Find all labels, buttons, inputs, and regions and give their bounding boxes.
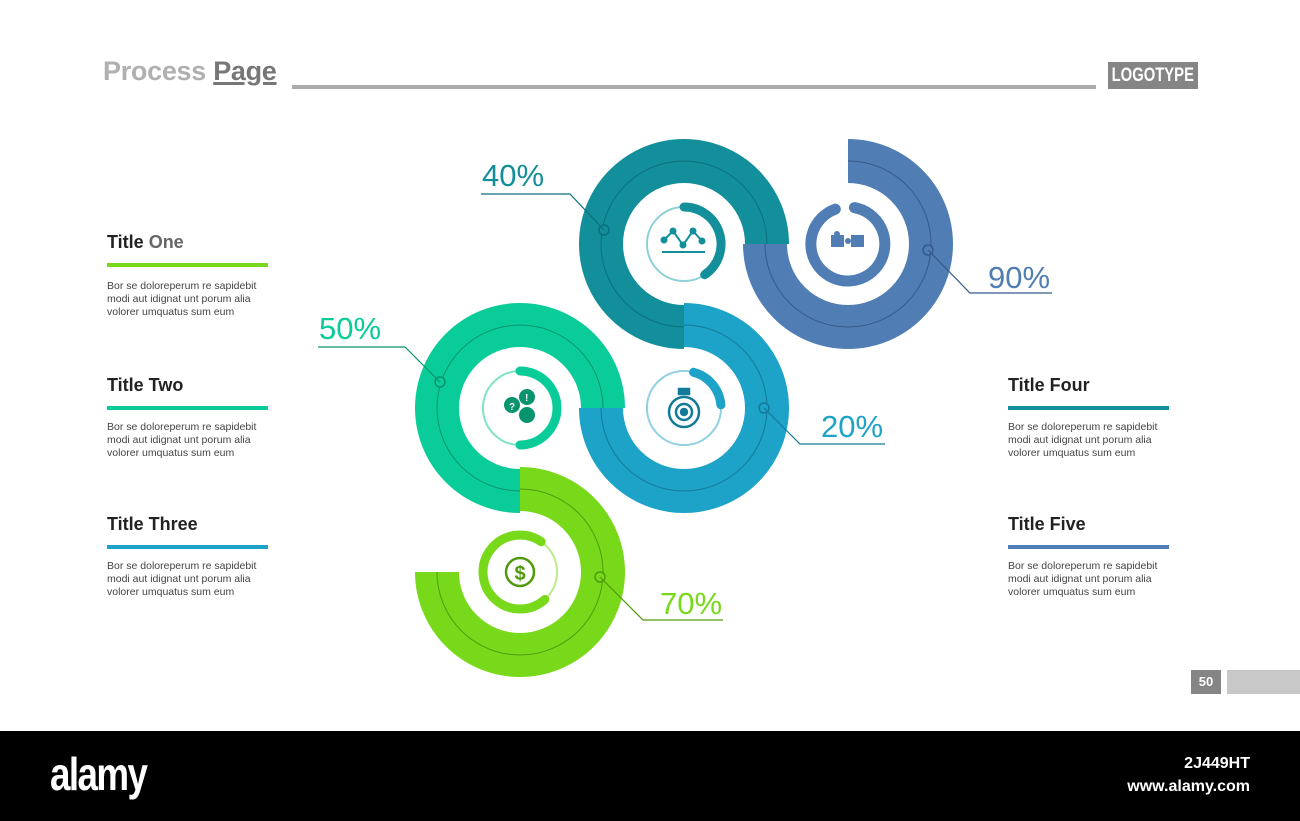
footer url: www.alamy.com xyxy=(1127,778,1250,795)
icon: dollar cycle xyxy=(506,558,534,586)
logotype: LOGOTYPE xyxy=(1112,65,1194,86)
text block: Title Three: modi aut idignat unt porum alia xyxy=(107,573,251,585)
footer band xyxy=(0,731,1300,821)
text block: Title Two: Bor se doloreperum re sapidebit xyxy=(107,421,256,433)
text block: Title Three xyxy=(107,514,268,598)
text block: Title Five: modi aut idignat unt porum alia xyxy=(1008,573,1152,585)
callout: 50% xyxy=(318,311,440,382)
header line xyxy=(292,85,1096,89)
text block: Title Two: modi aut idignat unt porum alia xyxy=(107,434,251,446)
icon: chat bubbles: ? xyxy=(509,402,515,413)
ring: 40% xyxy=(599,161,767,327)
text block: Title Four: volorer umquatus sum eum xyxy=(1008,447,1135,459)
ring: 90% xyxy=(765,161,933,327)
text block: Title Four: modi aut idignat unt porum alia xyxy=(1008,434,1152,446)
text block: Title One: modi aut idignat unt porum alia xyxy=(107,293,251,305)
text block: Title One xyxy=(107,232,268,318)
footer id: 2J449HT xyxy=(1184,755,1250,772)
text block: Title Five: volorer umquatus sum eum xyxy=(1008,586,1135,598)
text block: Title Five: Bor se doloreperum re sapidebit xyxy=(1008,560,1157,572)
text block: Title Four: Title Four xyxy=(1008,375,1090,395)
title: Process Page xyxy=(103,56,277,86)
icon: stopwatch gear xyxy=(669,389,699,427)
callout: 70%: 70% xyxy=(660,586,722,621)
text block: Title Three: volorer umquatus sum eum xyxy=(107,586,234,598)
footer logo: alamy xyxy=(50,748,146,800)
text block: Title Two: Title Two xyxy=(107,375,183,395)
text block: Title Two xyxy=(107,375,268,459)
text block: Title Two: volorer umquatus sum eum xyxy=(107,447,234,459)
ring: 70% xyxy=(437,489,605,655)
text block: Title Four xyxy=(1008,375,1169,459)
page bar xyxy=(1227,670,1300,694)
icon: line chart xyxy=(662,228,705,252)
page number: 50 xyxy=(1199,674,1213,689)
icon: chat bubbles xyxy=(504,389,535,423)
callout: 70% xyxy=(600,577,723,621)
text block: Title Three: Bor se doloreperum re sapidebit xyxy=(107,560,256,572)
text block: Title One: volorer umquatus sum eum xyxy=(107,306,234,318)
callout: 20% xyxy=(764,408,885,444)
icon: dollar cycle: $ xyxy=(514,563,526,585)
text block: Title One: Bor se doloreperum re sapidebit xyxy=(107,280,256,292)
callout: 50%: 50% xyxy=(319,311,381,346)
text block: Title Three: Title Three xyxy=(107,514,198,534)
text block: Title Four: Bor se doloreperum re sapidebit xyxy=(1008,421,1157,433)
callout: 90%: 90% xyxy=(988,260,1050,295)
text block: Title Five: Title Five xyxy=(1008,514,1086,534)
callout: 20%: 20% xyxy=(821,409,883,444)
callout: 40% xyxy=(481,158,604,230)
page number xyxy=(1191,670,1221,694)
icon: puzzle xyxy=(831,231,864,247)
callout: 40%: 40% xyxy=(482,158,544,193)
callout: 90% xyxy=(928,250,1052,295)
ring: 50% xyxy=(435,325,603,491)
text block: Title Five xyxy=(1008,514,1169,598)
ring: 20% xyxy=(601,325,769,491)
icon: chat bubbles: ! xyxy=(525,393,528,404)
text block: Title One: Title One xyxy=(107,232,184,252)
